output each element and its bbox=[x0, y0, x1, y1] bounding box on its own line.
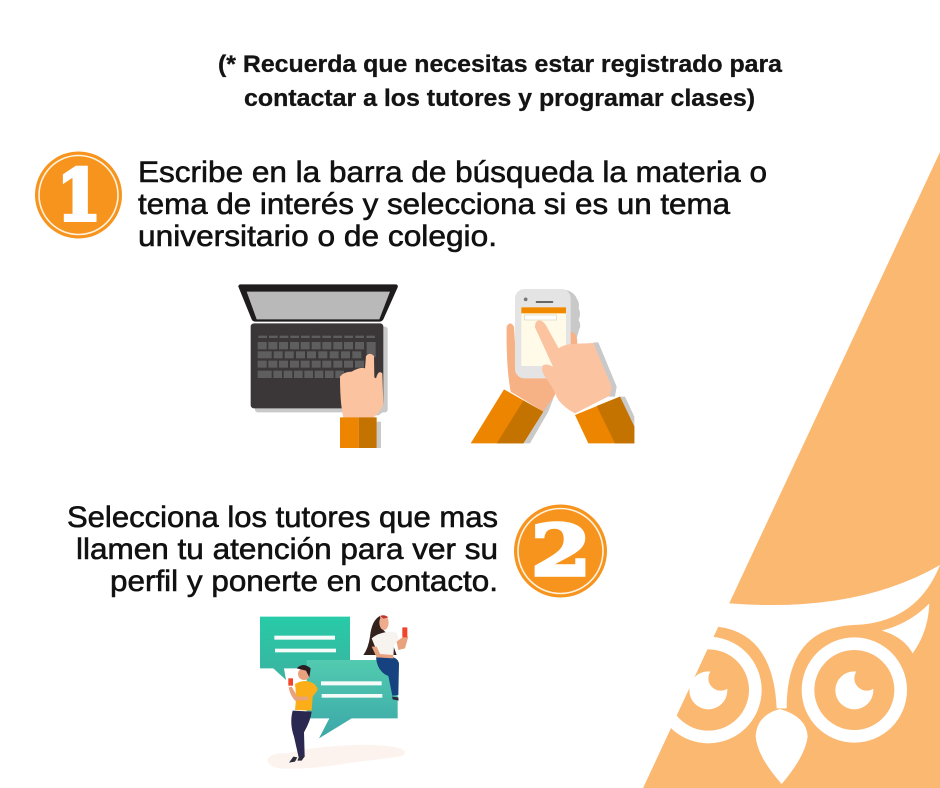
woman bbox=[363, 615, 408, 701]
white mask left of the diagonal bbox=[600, 590, 735, 788]
step 2 text: perfil y ponerte en contacto. bbox=[110, 565, 498, 598]
step 2 number badge bbox=[514, 504, 607, 598]
step 1 text bbox=[138, 156, 767, 253]
icon: laptop with hand bbox=[238, 284, 398, 448]
step 1 text: universitario o de colegio. bbox=[138, 220, 497, 253]
icon: phone held in hands bbox=[471, 289, 634, 443]
step 2 text bbox=[67, 501, 498, 598]
step 2 text: llamen tu atención para ver su bbox=[76, 533, 498, 566]
step 1 number badge: 1 bbox=[57, 154, 101, 237]
step 1 text: tema de interés y selecciona si es un tema bbox=[138, 188, 730, 221]
note heading: contactar a los tutores y programar clases) bbox=[244, 85, 755, 112]
step 1 number badge bbox=[35, 152, 122, 238]
note heading: (* Recuerda que necesitas estar registrado para bbox=[218, 51, 783, 78]
owl panel bbox=[600, 152, 940, 788]
note heading bbox=[218, 51, 783, 112]
step 2 text: Selecciona los tutores que mas bbox=[67, 501, 498, 534]
icon: owl face bbox=[655, 565, 940, 784]
illustration: people chatting bbox=[260, 615, 408, 769]
step 1 text: Escribe en la barra de búsqueda la materia o bbox=[138, 156, 767, 189]
step 2 number badge: 2 bbox=[531, 509, 591, 592]
orange background triangle bbox=[643, 152, 940, 788]
man bbox=[288, 665, 318, 763]
